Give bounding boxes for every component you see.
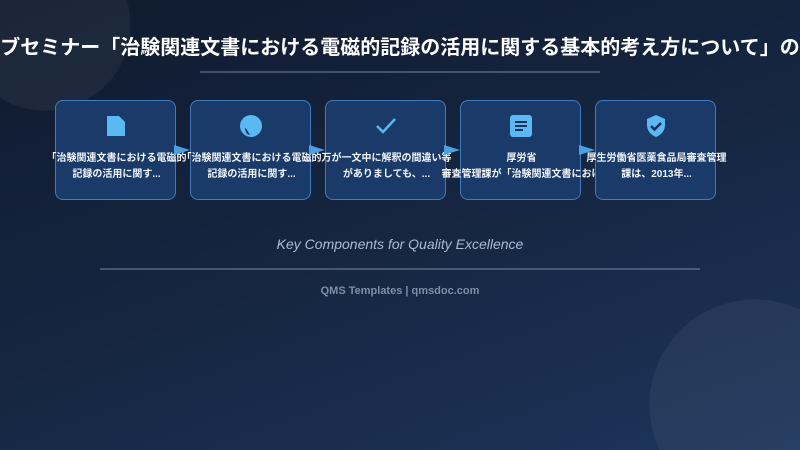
card text 1 [46, 152, 186, 180]
card text 1: 「治験関連文書における電磁的 [46, 153, 186, 164]
card 2: globe [190, 100, 311, 200]
card text 4: 厚労省 [506, 153, 536, 164]
icon: document [107, 116, 125, 136]
icon: check [376, 118, 396, 134]
card text 2 [182, 152, 322, 180]
arrow 3 [444, 145, 460, 155]
icon: globe [240, 115, 262, 137]
subtitle: Key Components for Quality Excellence [277, 236, 523, 252]
card 1: document [55, 100, 176, 200]
card 4: list [460, 100, 581, 200]
card text 2: 「治験関連文書における電磁的 [182, 153, 322, 164]
card text 3 [322, 152, 452, 180]
card 3: check [325, 100, 446, 200]
card text 5 [586, 152, 726, 180]
arrow 1 [174, 145, 190, 155]
card text 5: 課は、2013年... [621, 169, 692, 180]
card text 3: がありましても、... [343, 169, 430, 180]
title: ブセミナー「治験関連文書における電磁的記録の活用に関する基本的考え方について」の [0, 37, 800, 59]
icon: list [510, 115, 532, 137]
card text 5: 厚生労働省医薬食品局審査管理 [586, 153, 726, 164]
card text 3: 万が一文中に解釈の間違い等 [322, 153, 452, 164]
card text 1: 記録の活用に関す... [72, 169, 161, 180]
icon: shield [647, 115, 665, 137]
card text 4: 審査管理課が「治験関連文書におけ [442, 169, 602, 180]
arrow 4 [579, 145, 595, 155]
card text 2: 記録の活用に関す... [207, 169, 296, 180]
footer: QMS Templates | qmsdoc.com [321, 285, 479, 297]
card text 4 [442, 152, 602, 180]
arrow 2 [309, 145, 325, 155]
card 5: shield [595, 100, 716, 200]
